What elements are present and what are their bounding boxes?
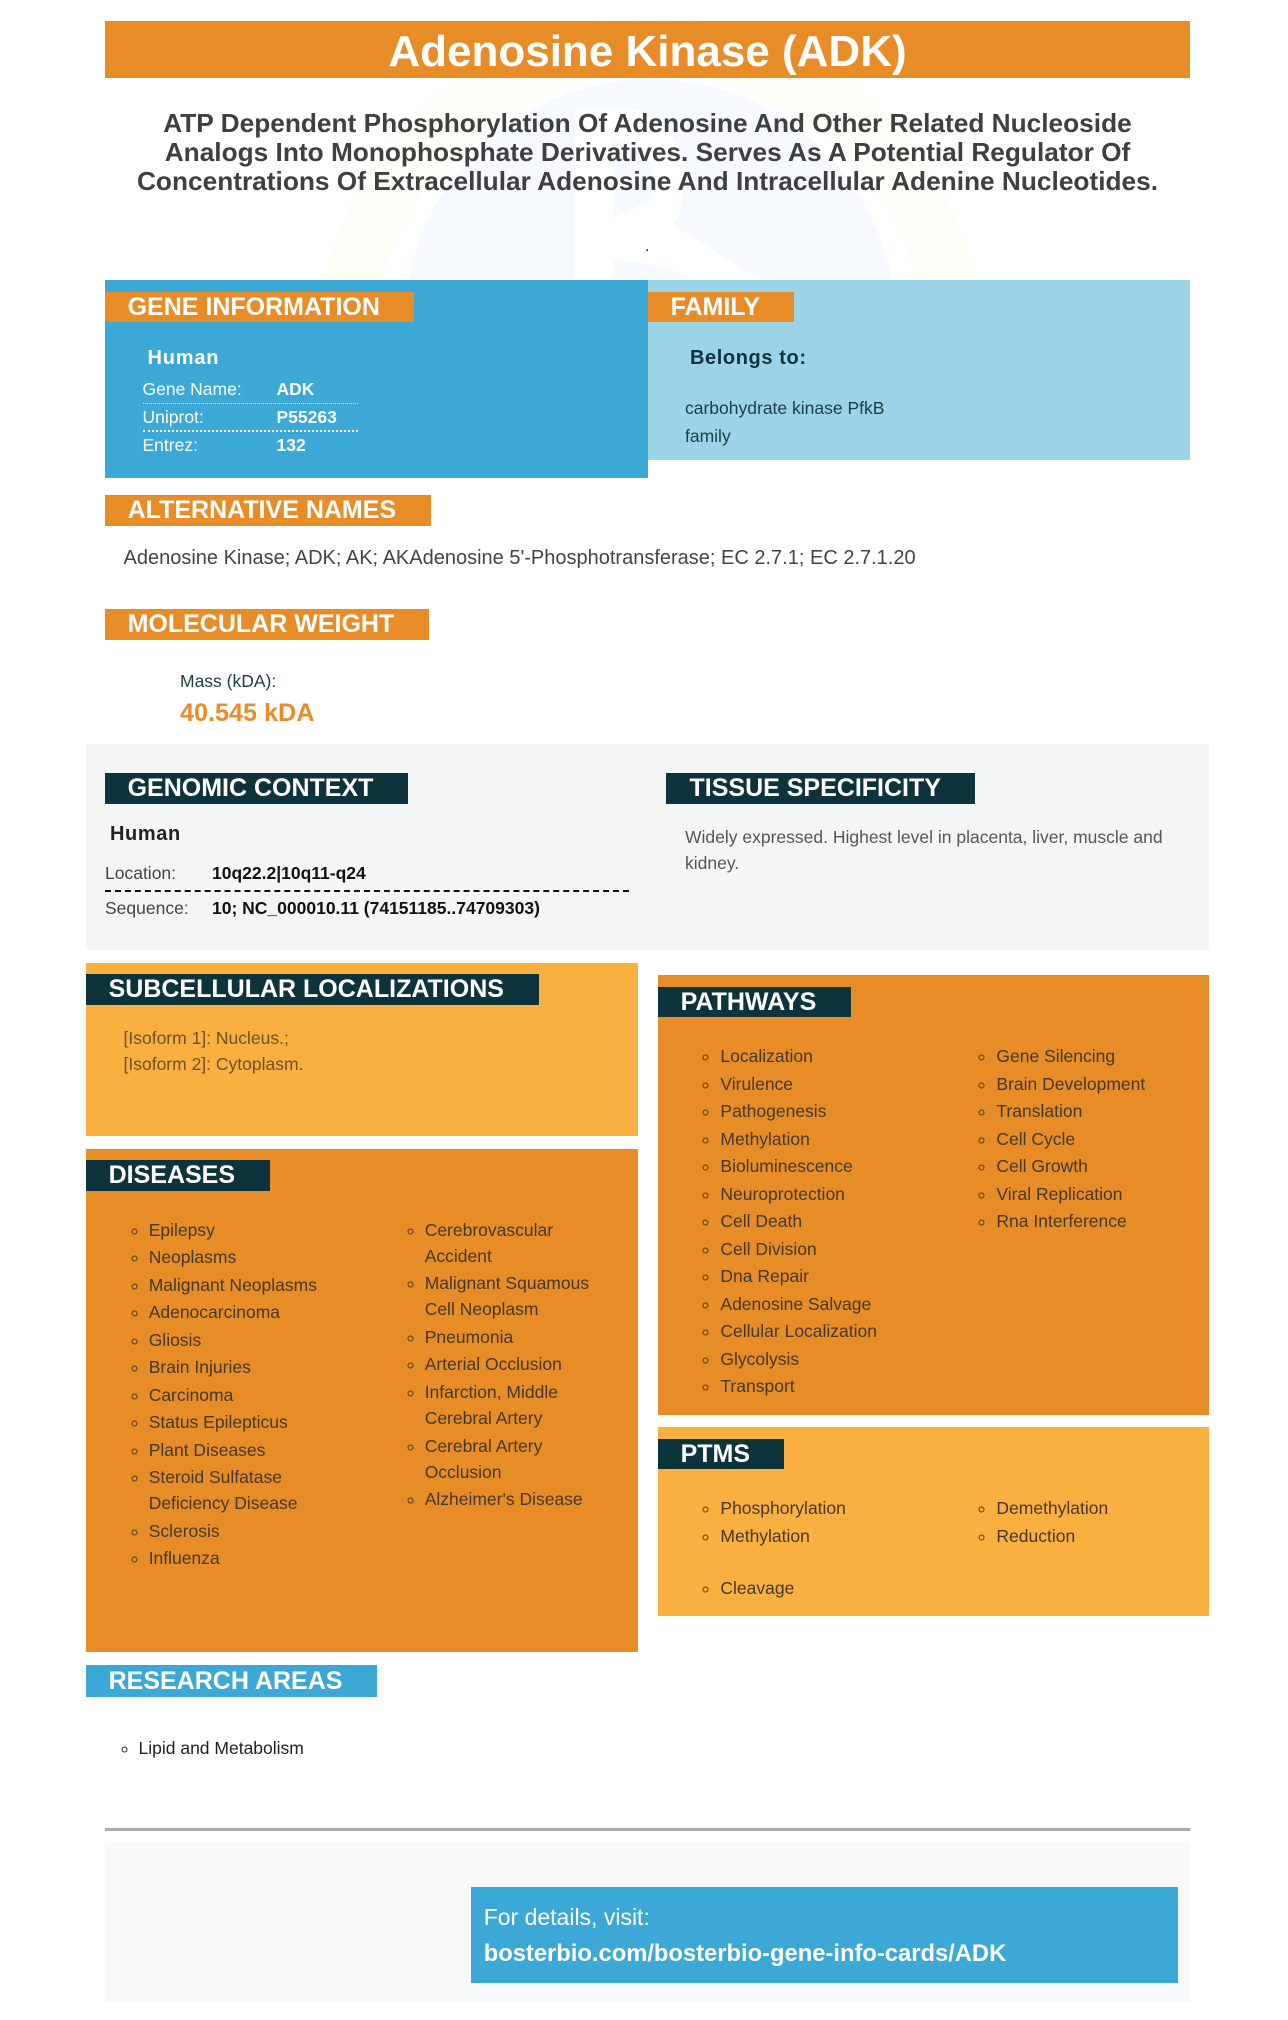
disease list column 2: Malignant Squamous [425, 1273, 589, 1293]
entrez row [142, 435, 306, 455]
sequence row: Sequence: [105, 898, 189, 918]
panel: subcellular localizations [86, 963, 638, 1136]
pathway list column 2: Rna Interference [996, 1211, 1127, 1231]
panel: genomic context and tissue specificity [86, 744, 1209, 950]
pathway list column 1: Dna Repair [720, 1266, 809, 1286]
panel: pathways [658, 975, 1209, 1415]
pathway list column 1: Cellular Localization [720, 1321, 877, 1341]
heading: genomic context: GENOMIC CONTEXT [128, 774, 373, 802]
subtitle description: ATP Dependent Phosphorylation Of Adenosine And Other Related Nucleoside [163, 108, 1132, 138]
panel: diseases [86, 1149, 638, 1652]
disease list column 2: Cerebral Artery [425, 1408, 542, 1428]
callout: details link [471, 1887, 1178, 1983]
pathway list column 1: Virulence [720, 1074, 793, 1094]
PTM list column 1 [702, 1498, 846, 1546]
subtitle description: Analogs Into Monophosphate Derivatives. Serves As A Potential Regulator Of [165, 137, 1130, 167]
pathway list column 2: Translation [996, 1101, 1082, 1121]
family name: carbohydrate kinase PfkB [685, 398, 884, 418]
heading: pathways [658, 987, 851, 1017]
disease list column 2: Alzheimer's Disease [425, 1489, 583, 1509]
disease list column 2: Accident [425, 1246, 492, 1266]
title banner [105, 21, 1190, 78]
disease list column 1: Steroid Sulfatase [149, 1467, 282, 1487]
disease list column 2: Infarction, Middle [425, 1382, 558, 1402]
panel: footer [105, 1843, 1190, 2002]
pathway list column 1: Glycolysis [720, 1348, 799, 1368]
stray dot: . [645, 238, 649, 255]
uniprot row [142, 404, 358, 432]
background watermark logo [408, 79, 892, 280]
PTM list column 1: Methylation [720, 1526, 810, 1546]
disease list column 1: Neoplasms [149, 1247, 236, 1267]
PTM list column 2: Demethylation [996, 1498, 1108, 1518]
disease list column 1: Epilepsy [149, 1220, 215, 1240]
disease list column 2 [408, 1220, 589, 1509]
disease list column 2: Pneumonia [425, 1327, 513, 1347]
uniprot row: P55263 [276, 407, 337, 427]
location row: 10q22.2|10q11-q24 [212, 863, 366, 883]
pathway list column 2: Viral Replication [996, 1184, 1123, 1204]
pathway list column 1: Cell Death [720, 1211, 802, 1231]
heading: molecular weight: MOLECULAR WEIGHT [128, 610, 394, 638]
heading: subcellular localizations: SUBCELLULAR LOCALIZATIONS [109, 975, 504, 1003]
mass label: Mass (kDA): [180, 671, 276, 691]
disease list column 1 [132, 1220, 317, 1568]
pathway list column 1 [702, 1046, 877, 1396]
entrez row: Entrez: [142, 435, 198, 455]
heading: tissue specificity: TISSUE SPECIFICITY [690, 774, 941, 802]
disease list column 2: Arterial Occlusion [425, 1354, 562, 1374]
pathway list column 1: Cell Division [720, 1238, 817, 1258]
title banner: Adenosine Kinase (ADK) [388, 27, 907, 76]
callout label: For details, visit: [484, 1904, 650, 1930]
heading: research areas: RESEARCH AREAS [109, 1667, 342, 1695]
disease list column 2: Cerebrovascular [425, 1220, 553, 1240]
pathway list column 1: Neuroprotection [720, 1184, 845, 1204]
family name [685, 398, 884, 446]
disease list column 1: Deficiency Disease [149, 1493, 298, 1513]
disease list column 2: Occlusion [425, 1462, 502, 1482]
heading: diseases [86, 1160, 270, 1191]
pathway list column 1: Bioluminescence [720, 1156, 853, 1176]
disease list column 1: Influenza [149, 1548, 220, 1568]
disease list column 2: Cerebral Artery [425, 1436, 542, 1456]
callout url: bosterbio.com/bosterbio-gene-info-cards/ADK [484, 1940, 1006, 1967]
localization text [124, 1028, 303, 1074]
disease list column 2: Cell Neoplasm [425, 1299, 538, 1319]
mass value: 40.545 kDA [180, 698, 314, 726]
pathway list column 2: Cell Growth [996, 1156, 1088, 1176]
sequence row: 10; NC_000010.11 (74151185..74709303) [212, 898, 540, 918]
entrez row: 132 [276, 435, 306, 455]
disease list column 1: Sclerosis [149, 1521, 220, 1541]
heading: family [648, 292, 794, 322]
tissue specificity text: Widely expressed. Highest level in placenta, liver, muscle and [685, 827, 1163, 847]
research areas list: Lipid and Metabolism [138, 1738, 304, 1758]
tissue specificity text: kidney. [685, 853, 739, 873]
PTM list column 2 [978, 1498, 1108, 1546]
pathway list column 1: Localization [720, 1046, 813, 1066]
localization text: [Isoform 1]: Nucleus.; [124, 1028, 289, 1048]
species label: Human [148, 347, 219, 369]
gene name row: Gene Name: [142, 379, 242, 399]
gene name row [142, 376, 358, 404]
subtitle description: Concentrations Of Extracellular Adenosine And Intracellular Adenine Nucleotides. [137, 166, 1158, 196]
heading: PTMs: PTMS [681, 1440, 750, 1468]
localization text: [Isoform 2]: Cytoplasm. [124, 1054, 303, 1074]
heading: diseases: DISEASES [109, 1161, 235, 1189]
pathway list column 1: Adenosine Salvage [720, 1294, 871, 1314]
PTM list overflow item: Cleavage [720, 1578, 794, 1598]
PTM list column 1: Phosphorylation [720, 1498, 846, 1518]
pathway list column 1: Transport [720, 1376, 795, 1396]
heading: alternative names: ALTERNATIVE NAMES [128, 496, 396, 524]
location row [105, 860, 629, 892]
disease list column 1: Carcinoma [149, 1384, 233, 1404]
disease list column 1: Malignant Neoplasms [149, 1274, 317, 1294]
PTM list column 2: Reduction [996, 1526, 1075, 1546]
pathway list column 1: Pathogenesis [720, 1101, 826, 1121]
disease list column 1: Gliosis [149, 1330, 201, 1350]
panel: PTMs [658, 1427, 1209, 1616]
gene name row: ADK [276, 379, 314, 399]
subtitle description [137, 108, 1158, 196]
pathway list column 2 [978, 1046, 1146, 1231]
tissue specificity text [685, 827, 1163, 873]
species label: Human [110, 823, 181, 845]
location row: Location: [105, 863, 176, 883]
heading: PTMs [658, 1439, 784, 1469]
disease list column 1: Plant Diseases [149, 1440, 265, 1460]
pathway list column 2: Cell Cycle [996, 1128, 1075, 1148]
pathway list column 2: Gene Silencing [996, 1046, 1115, 1066]
family name: family [685, 426, 731, 446]
disease list column 1: Status Epilepticus [149, 1412, 288, 1432]
disease list column 1: Adenocarcinoma [149, 1302, 280, 1322]
footer divider [105, 1828, 1190, 1831]
panel: family [648, 280, 1190, 460]
panel: gene information [105, 280, 648, 478]
heading: pathways: PATHWAYS [681, 988, 816, 1016]
pathway list column 2: Brain Development [996, 1074, 1145, 1094]
heading: family: FAMILY [671, 293, 760, 321]
disease list column 1: Brain Injuries [149, 1357, 251, 1377]
pathway list column 1: Methylation [720, 1128, 810, 1148]
uniprot row: Uniprot: [142, 407, 204, 427]
heading: gene information: GENE INFORMATION [128, 293, 380, 321]
belongs to label: Belongs to: [690, 347, 807, 369]
alternative names text: Adenosine Kinase; ADK; AK; AKAdenosine 5'-Phosphotransferase; EC 2.7.1; EC 2.7.1.20 [124, 547, 916, 569]
